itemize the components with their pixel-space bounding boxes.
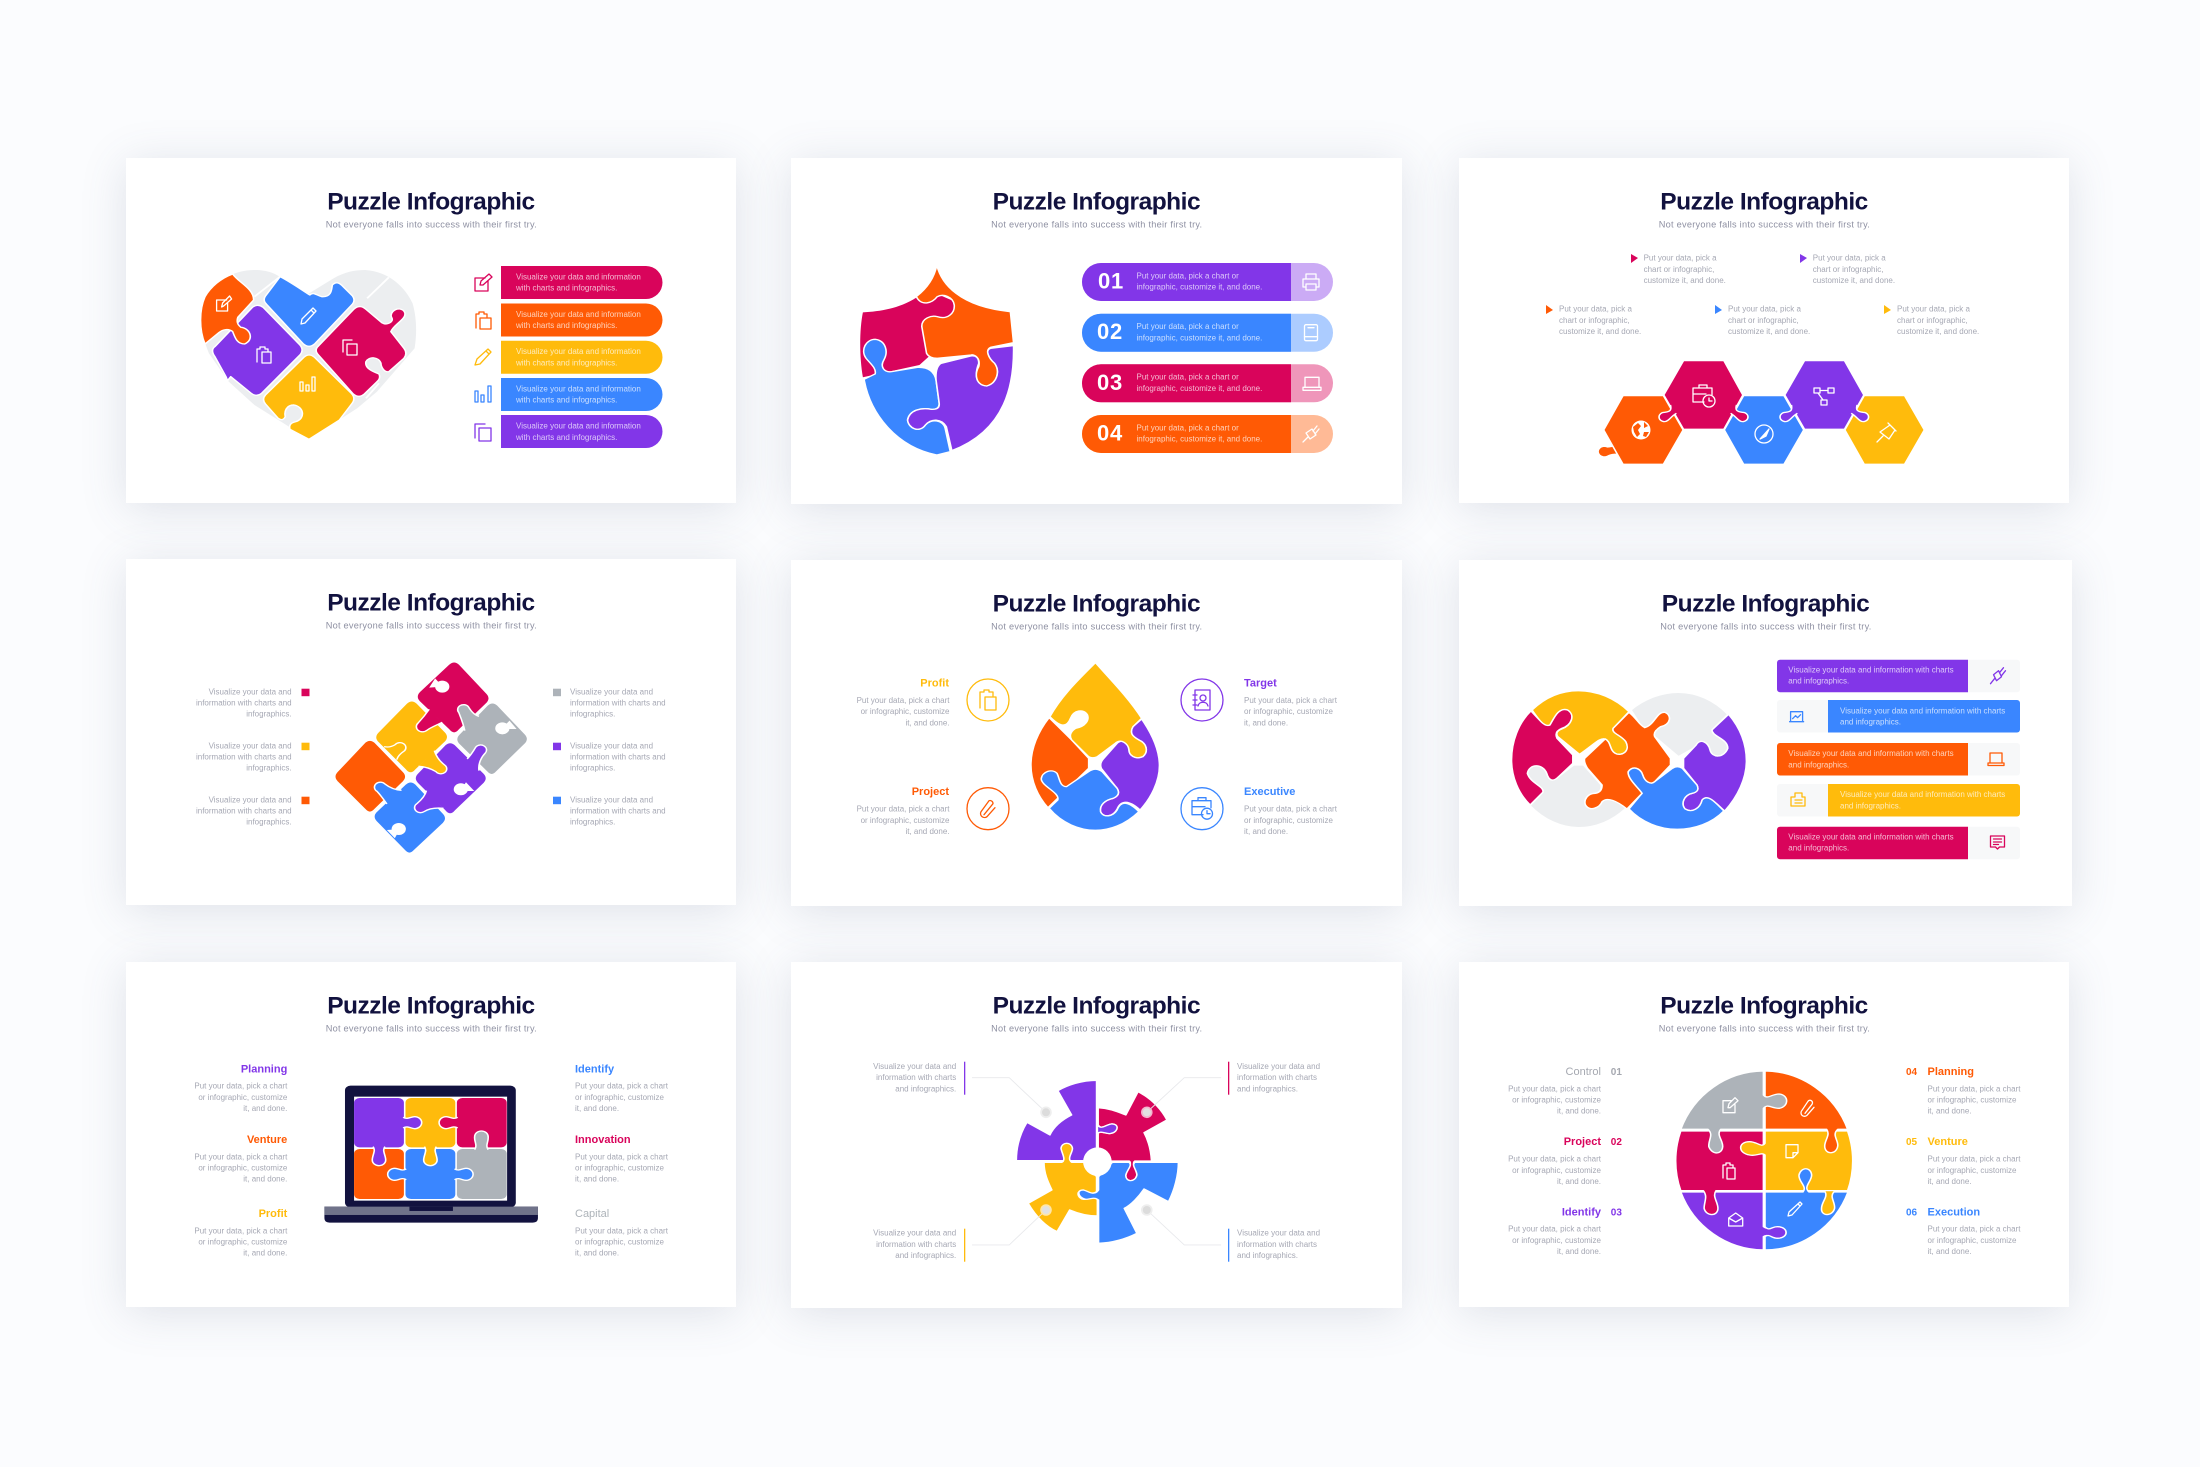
pill row 01 — [1082, 263, 1333, 301]
heart puzzle graphic — [201, 270, 416, 439]
pill row 04: infographic, customize it, and done. — [1136, 435, 1262, 444]
callout: Target: it, and done. — [1244, 718, 1288, 727]
icon ring: briefcase clock — [1181, 788, 1223, 830]
callout: Identify 03: or infographic, customize — [1512, 1236, 1602, 1245]
panel: circle puzzle — [1459, 962, 2069, 1307]
callout: Identify: or infographic, customize — [575, 1093, 664, 1102]
bar row 3: Visualize your data and information — [516, 347, 641, 356]
callout top left: information with charts — [876, 1073, 956, 1082]
circle puzzle graphic — [1676, 1071, 1853, 1250]
legend left 1 — [196, 687, 310, 719]
icon: fax — [1791, 793, 1805, 806]
bar row 1 — [1777, 660, 2020, 692]
bar row 4: Visualize your data and information — [516, 384, 641, 393]
title: Puzzle Infographic — [1660, 992, 1868, 1019]
list icon: bars — [475, 386, 491, 402]
subtitle: Not everyone falls into success with their first try. — [326, 219, 537, 229]
pill row 01: 01 — [1098, 268, 1124, 294]
icon: pencil — [301, 308, 316, 324]
bar row 4: and infographics. — [1840, 801, 1901, 810]
list icon: copy — [475, 424, 491, 441]
icon: compass — [1755, 425, 1773, 443]
callout: Executive: it, and done. — [1244, 827, 1288, 836]
callout: orange — [1546, 305, 1641, 336]
callout: purple: chart or infographic, — [1813, 265, 1884, 274]
callout: Executive: Executive — [1244, 786, 1295, 798]
bar row 1: with charts and infographics. — [515, 284, 617, 293]
legend right 1: information with charts and — [570, 698, 666, 708]
legend right 2: information with charts and — [570, 752, 666, 762]
callout: Planning 04 — [1906, 1066, 2021, 1116]
icon: edit — [1723, 1098, 1738, 1113]
callout: Planning 04: 04 — [1906, 1067, 1918, 1078]
callout: crimson — [1631, 254, 1726, 285]
callout: Project: Put your data, pick a chart — [857, 805, 950, 814]
pill row 02: infographic, customize it, and done. — [1136, 333, 1262, 342]
callout: Execution 06: or infographic, customize — [1928, 1236, 2017, 1245]
callout: Innovation — [575, 1134, 669, 1184]
bar row 2: Visualize your data and information with charts — [1840, 706, 2005, 715]
callout: Profit: Put your data, pick a chart — [857, 696, 950, 705]
diagonal puzzle graphic — [335, 662, 528, 853]
callout: yellow — [1884, 305, 1979, 336]
pill row 04 — [1082, 415, 1333, 453]
icon: clipboard — [1723, 1163, 1735, 1179]
icon: chart monitor — [1790, 712, 1804, 722]
bar row 2: and infographics. — [1840, 718, 1901, 727]
callout: Target: Target — [1244, 677, 1277, 689]
callout: Profit — [857, 677, 950, 727]
panel: diagonal puzzle — [126, 559, 736, 905]
bar row 4 — [1777, 784, 2020, 816]
callout: Control 01: 01 — [1611, 1067, 1622, 1078]
subtitle: Not everyone falls into success with their first try. — [991, 219, 1202, 229]
bar row 1: Visualize your data and information — [516, 272, 641, 282]
bar row 1: and infographics. — [1788, 677, 1849, 686]
callout: Target: or infographic, customize — [1244, 707, 1333, 716]
callout: Venture 05: or infographic, customize — [1928, 1166, 2017, 1175]
callout: orange: chart or infographic, — [1559, 316, 1630, 325]
callout: Project 02: Project — [1564, 1136, 1601, 1148]
icon: briefcase clock — [1693, 385, 1715, 407]
icon ring: clipboard — [967, 679, 1009, 721]
callout: Execution 06: it, and done. — [1928, 1247, 1972, 1256]
callout top left: and infographics. — [895, 1084, 956, 1093]
bar row 5 — [1777, 827, 2020, 859]
icon: pin — [1877, 423, 1896, 442]
callout: Project: or infographic, customize — [861, 816, 950, 825]
icon: paperclip — [1801, 1100, 1814, 1116]
pill row 03: Put your data, pick a chart or — [1136, 373, 1239, 382]
legend right 3: Visualize your data and — [570, 795, 653, 804]
legend left 3: infographics. — [246, 818, 292, 827]
callout: Innovation: it, and done. — [575, 1175, 619, 1184]
callout: Venture: or infographic, customize — [198, 1164, 288, 1172]
callout: Control 01: it, and done. — [1557, 1107, 1601, 1116]
callout: orange: customize it, and done. — [1559, 327, 1641, 336]
callout: Venture: Venture — [247, 1134, 287, 1146]
callout: Planning: or infographic, customize — [198, 1093, 288, 1102]
callout: Planning 04: it, and done. — [1928, 1107, 1972, 1116]
laptop with puzzle screen — [324, 1086, 538, 1223]
title: Puzzle Infographic — [327, 589, 535, 616]
callout top right: and infographics. — [1237, 1084, 1298, 1093]
list icon: clipboard — [476, 312, 491, 329]
callout: blue: customize it, and done. — [1728, 327, 1810, 336]
legend left 2 — [196, 741, 310, 773]
subtitle: Not everyone falls into success with their first try. — [1659, 1023, 1870, 1033]
icon: mail — [1729, 1213, 1743, 1226]
bar row 5 — [501, 415, 662, 448]
callout: Profit: Put your data, pick a chart — [194, 1226, 287, 1235]
legend right 3: information with charts and — [570, 806, 666, 816]
callout: orange: Put your data, pick a — [1559, 305, 1632, 314]
callout top left: Visualize your data and — [873, 1062, 956, 1071]
callout: Project 02: or infographic, customize — [1512, 1166, 1602, 1175]
callout bottom right: Visualize your data and — [1237, 1229, 1320, 1238]
infinity puzzle graphic — [1512, 691, 1746, 829]
bar row 1 — [501, 266, 662, 299]
panel: laptop puzzle — [126, 962, 736, 1307]
legend left 2: Visualize your data and — [209, 741, 292, 750]
callout: Innovation: Put your data, pick a chart — [575, 1152, 668, 1161]
legend left 2: information with charts and — [196, 752, 292, 762]
callout: Identify 03: Put your data, pick a chart — [1508, 1225, 1601, 1234]
callout: Venture 05: Put your data, pick a chart — [1928, 1155, 2020, 1164]
callout: Capital: Capital — [575, 1208, 609, 1220]
icon: globe — [1632, 420, 1650, 440]
title: Puzzle Infographic — [1660, 188, 1868, 215]
callout: Venture: Put your data, pick a chart — [194, 1152, 287, 1161]
icon: copy — [343, 340, 357, 355]
icon: note — [1786, 1145, 1798, 1158]
callout: Project 02: 02 — [1611, 1137, 1622, 1148]
bar row 2: Visualize your data and information — [516, 310, 641, 319]
pill row 02 — [1082, 314, 1333, 352]
callout: Venture 05 — [1906, 1136, 2021, 1186]
callout: Identify 03: it, and done. — [1557, 1247, 1601, 1256]
callout: Project 02: Put your data, pick a chart — [1508, 1155, 1601, 1164]
callout bottom right: and infographics. — [1237, 1251, 1298, 1260]
icon: laptop — [1988, 753, 2004, 766]
legend left 1: information with charts and — [196, 698, 292, 708]
callout: Profit — [194, 1208, 288, 1258]
subtitle: Not everyone falls into success with their first try. — [326, 1023, 537, 1033]
callout: Identify — [575, 1064, 669, 1113]
icon: laptop — [1303, 377, 1321, 390]
panel: gear puzzle — [791, 962, 1402, 1308]
icon: clipboard — [257, 347, 271, 363]
callout: Execution 06 — [1906, 1207, 2021, 1256]
callout: Planning 04: Planning — [1928, 1066, 1974, 1078]
pill row 04: 04 — [1097, 420, 1123, 446]
center hole — [1083, 1147, 1112, 1176]
legend right 2: Visualize your data and — [570, 741, 653, 750]
callout: Execution 06: Execution — [1928, 1207, 1980, 1219]
shield puzzle graphic — [860, 265, 1014, 455]
legend right 1: infographics. — [570, 710, 615, 719]
callout: crimson: Put your data, pick a — [1644, 254, 1717, 263]
panel: infinity puzzle — [1459, 560, 2072, 906]
callout bottom left: information with charts — [876, 1240, 956, 1249]
drop puzzle graphic — [1031, 663, 1159, 830]
callout: Target: Put your data, pick a chart — [1244, 696, 1337, 705]
icon: bars — [300, 377, 315, 391]
callout: Execution 06: Put your data, pick a chart — [1928, 1225, 2020, 1234]
callout: Profit: or infographic, customize — [861, 707, 950, 716]
legend right 3: infographics. — [570, 818, 615, 827]
callout: Planning 04: Put your data, pick a chart — [1928, 1084, 2020, 1093]
list icon: edit — [475, 274, 492, 291]
callout: Control 01: Control — [1566, 1066, 1601, 1078]
callout: Planning: Planning — [241, 1064, 287, 1076]
callout: Executive: Put your data, pick a chart — [1244, 805, 1337, 814]
callout: blue: Put your data, pick a — [1728, 305, 1801, 314]
legend right 1 — [553, 687, 666, 719]
bar row 5: with charts and infographics. — [515, 433, 617, 442]
callout bottom right: information with charts — [1237, 1240, 1317, 1249]
gear puzzle graphic — [972, 1078, 1221, 1245]
callout top right: information with charts — [1237, 1073, 1317, 1082]
callout: Planning: Put your data, pick a chart — [194, 1082, 287, 1091]
title: Puzzle Infographic — [993, 590, 1201, 617]
callout: Project: it, and done. — [905, 827, 950, 836]
bar row 4: with charts and infographics. — [515, 396, 617, 404]
bar row 2 — [501, 304, 662, 336]
marker dots — [1040, 1106, 1153, 1216]
bar row 3: Visualize your data and information with charts — [1788, 749, 1954, 758]
callout: Capital — [575, 1208, 669, 1258]
icon: nodes — [1814, 388, 1834, 405]
callout: Executive: or infographic, customize — [1244, 816, 1333, 825]
callout: Venture: it, and done. — [243, 1175, 287, 1184]
panel: heart puzzle — [126, 158, 736, 503]
title: Puzzle Infographic — [327, 188, 535, 215]
callout: crimson: customize it, and done. — [1644, 276, 1726, 285]
callout: Identify 03 — [1508, 1207, 1622, 1256]
pill row 03 — [1082, 364, 1333, 402]
legend left 1: infographics. — [246, 710, 292, 719]
callout: Profit: it, and done. — [905, 718, 950, 727]
legend left 3 — [196, 795, 310, 827]
bar row 4 — [501, 378, 662, 411]
callout top left — [873, 1062, 965, 1095]
legend right 1: Visualize your data and — [570, 687, 653, 696]
callout: Planning: it, and done. — [243, 1104, 287, 1113]
callout: Capital: or infographic, customize — [575, 1238, 664, 1246]
pill row 04: Put your data, pick a chart or — [1136, 423, 1239, 432]
subtitle: Not everyone falls into success with their first try. — [326, 620, 537, 630]
bar row 2: with charts and infographics. — [515, 321, 617, 330]
icon: plug — [1303, 426, 1319, 442]
callout: Identify 03: 03 — [1611, 1208, 1622, 1219]
subtitle: Not everyone falls into success with their first try. — [1660, 621, 1871, 631]
icon: tablet — [1304, 325, 1318, 341]
callout: Venture 05: 05 — [1906, 1137, 1918, 1148]
callout: Identify: Put your data, pick a chart — [575, 1082, 668, 1091]
callout: Project 02 — [1508, 1136, 1622, 1186]
callout: Project — [857, 786, 950, 836]
callout: Execution 06: 06 — [1906, 1208, 1918, 1219]
bar row 5: Visualize your data and information with charts — [1788, 832, 1954, 841]
callout bottom left — [873, 1229, 965, 1262]
pill row 02: Put your data, pick a chart or — [1136, 322, 1239, 331]
callout top right — [1228, 1062, 1320, 1095]
title: Puzzle Infographic — [327, 992, 535, 1019]
bar row 4: Visualize your data and information with charts — [1840, 790, 2005, 799]
callout top right: Visualize your data and — [1237, 1062, 1320, 1071]
legend left 3: information with charts and — [196, 806, 292, 816]
icon: printer — [1303, 274, 1319, 290]
bar row 3: with charts and infographics. — [515, 358, 617, 367]
title: Puzzle Infographic — [993, 992, 1201, 1019]
icon ring: paperclip — [967, 788, 1009, 830]
legend right 2 — [553, 741, 666, 773]
callout: Planning — [194, 1064, 288, 1113]
callout: Target — [1244, 677, 1338, 727]
legend left 1: Visualize your data and — [209, 687, 292, 696]
bar row 3: and infographics. — [1788, 760, 1849, 769]
icon: message — [1990, 836, 2004, 849]
callout: purple — [1800, 254, 1895, 285]
callout: purple: Put your data, pick a — [1813, 254, 1886, 263]
icon: plug — [1990, 668, 2006, 684]
pill row 03: 03 — [1097, 370, 1123, 395]
panel: hexagon chain — [1459, 158, 2069, 503]
callout bottom left: and infographics. — [895, 1251, 956, 1260]
callout: blue: chart or infographic, — [1728, 316, 1799, 325]
callout: yellow: Put your data, pick a — [1897, 305, 1970, 314]
callout: Profit: it, and done. — [243, 1249, 287, 1258]
subtitle: Not everyone falls into success with their first try. — [991, 1023, 1202, 1033]
callout: Innovation: Innovation — [575, 1134, 631, 1146]
bar row 5: Visualize your data and information — [516, 422, 641, 431]
callout: Planning 04: or infographic, customize — [1928, 1096, 2017, 1104]
panel: drop puzzle — [791, 560, 1402, 906]
callout: crimson: chart or infographic, — [1644, 265, 1714, 274]
callout: Project: Project — [912, 786, 949, 798]
bar row 3 — [501, 341, 662, 374]
subtitle: Not everyone falls into success with their first try. — [1659, 219, 1870, 229]
callout: Executive — [1244, 786, 1338, 836]
pill row 01: infographic, customize it, and done. — [1136, 283, 1262, 292]
callout: Capital: it, and done. — [575, 1249, 619, 1258]
title: Puzzle Infographic — [1662, 590, 1870, 617]
legend left 2: infographics. — [246, 764, 292, 773]
callout bottom right — [1228, 1229, 1320, 1262]
callout: Profit: Profit — [920, 677, 949, 689]
bar row 3 — [1777, 743, 2020, 776]
callout: Profit: or infographic, customize — [198, 1238, 288, 1246]
callout: Venture 05: it, and done. — [1928, 1177, 1972, 1186]
callout: Capital: Put your data, pick a chart — [575, 1226, 668, 1235]
callout: Identify: Identify — [575, 1064, 615, 1076]
callout: blue — [1715, 305, 1810, 336]
legend right 2: infographics. — [570, 764, 615, 773]
title: Puzzle Infographic — [993, 188, 1201, 215]
callout: Control 01: or infographic, customize — [1512, 1096, 1602, 1104]
icon: edit — [217, 296, 232, 311]
list icon: pencil — [475, 349, 491, 365]
bar row 5: and infographics. — [1788, 844, 1849, 853]
callout: Venture 05: Venture — [1928, 1136, 1968, 1148]
callout: Venture — [194, 1134, 288, 1184]
callout: yellow: chart or infographic, — [1897, 316, 1968, 325]
callout: Control 01 — [1508, 1066, 1622, 1116]
bar row 1: Visualize your data and information with charts — [1788, 665, 1954, 674]
pill row 03: infographic, customize it, and done. — [1136, 384, 1262, 393]
callout bottom left: Visualize your data and — [873, 1229, 956, 1238]
hexagon puzzle graphic — [1599, 361, 1924, 464]
legend left 3: Visualize your data and — [209, 795, 292, 804]
pill row 01: Put your data, pick a chart or — [1136, 271, 1239, 280]
callout: purple: customize it, and done. — [1813, 276, 1895, 285]
panel: shield puzzle — [791, 158, 1402, 504]
callout: Project 02: it, and done. — [1557, 1177, 1601, 1186]
icon: pencil — [1788, 1202, 1802, 1216]
bar row 2 — [1777, 700, 2020, 732]
icon ring: contact book — [1181, 679, 1223, 721]
callout: yellow: customize it, and done. — [1897, 327, 1979, 336]
legend right 3 — [553, 795, 666, 827]
subtitle: Not everyone falls into success with their first try. — [991, 621, 1202, 631]
callout: Innovation: or infographic, customize — [575, 1164, 664, 1172]
callout: Profit: Profit — [259, 1208, 288, 1220]
pill row 02: 02 — [1097, 319, 1123, 344]
callout: Control 01: Put your data, pick a chart — [1508, 1084, 1601, 1093]
callout: Identify 03: Identify — [1562, 1207, 1602, 1219]
callout: Identify: it, and done. — [575, 1104, 619, 1113]
